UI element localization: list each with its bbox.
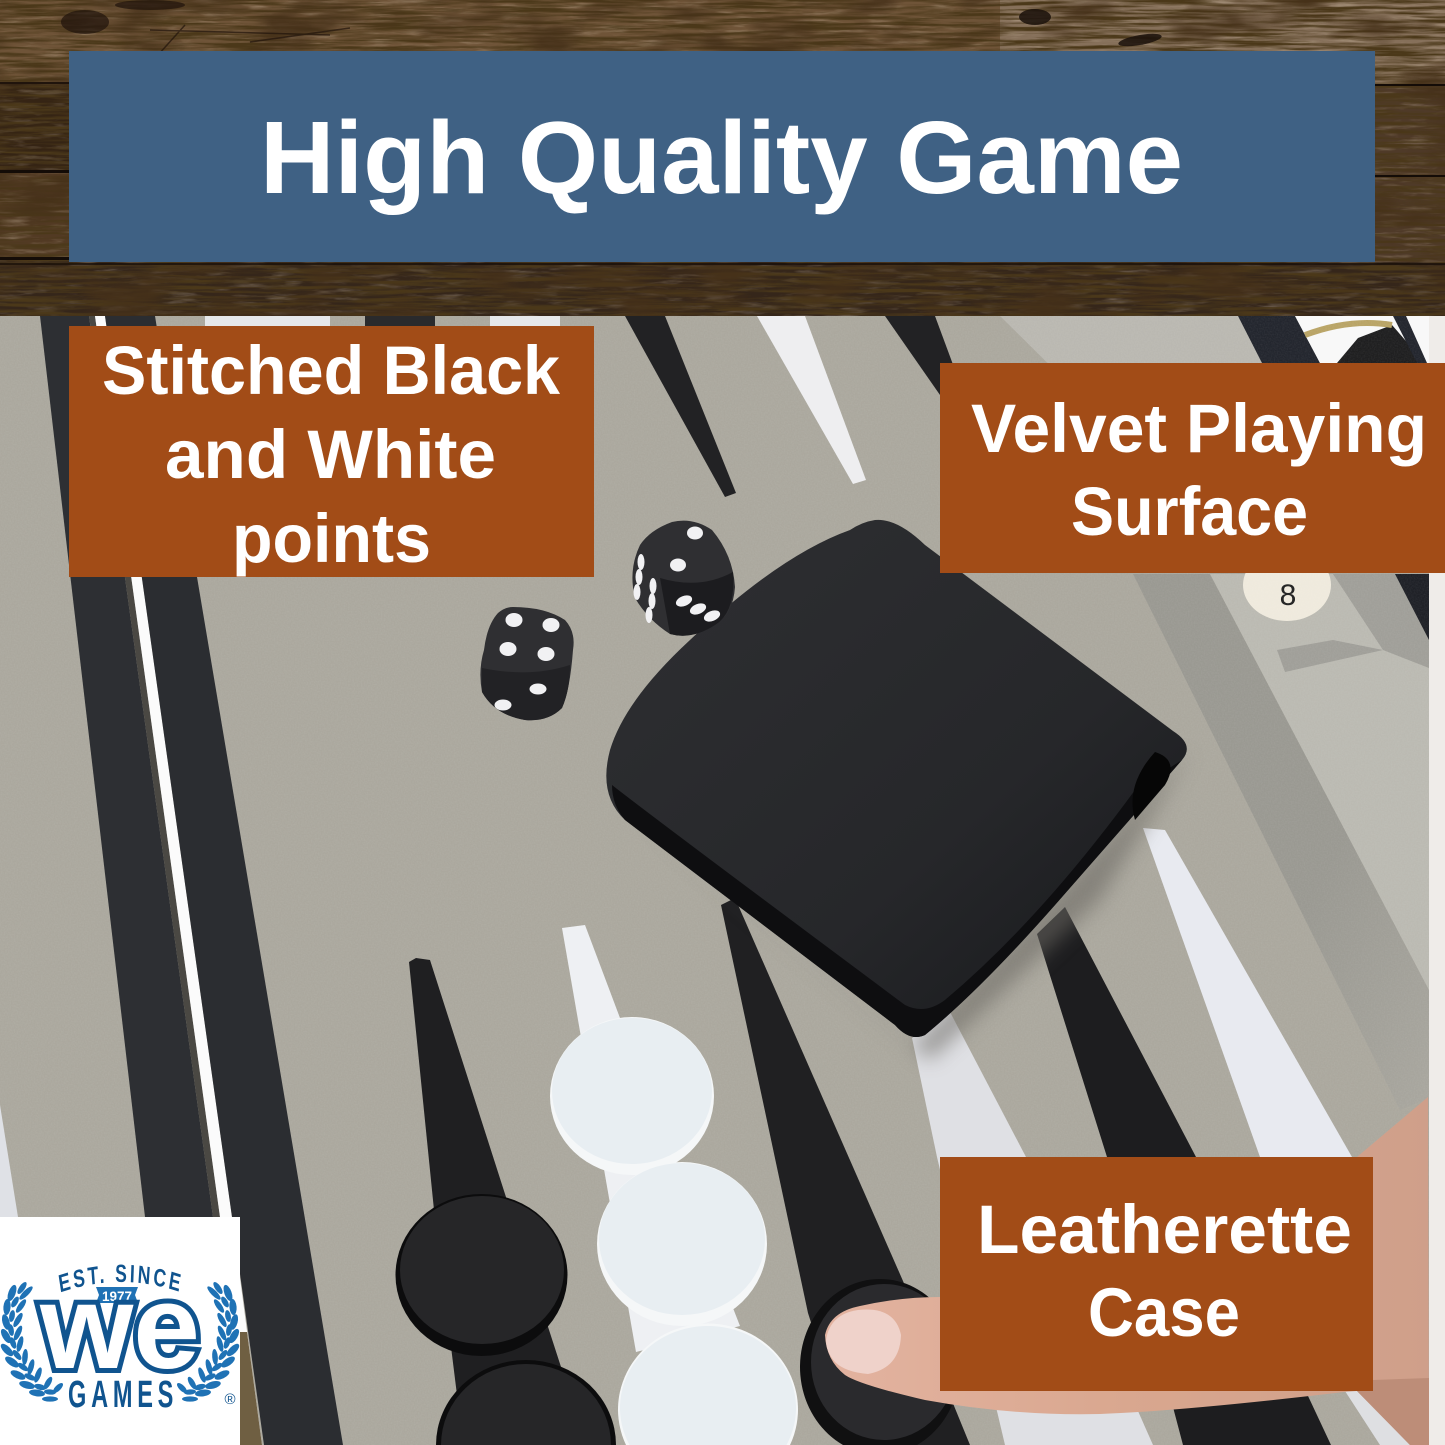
- callout: leatherette case: [940, 1157, 1373, 1391]
- white checker bottom: [618, 1324, 798, 1445]
- white point centre-left: [562, 925, 740, 1352]
- cup dark lower lip: [612, 760, 1182, 1037]
- die right: [632, 521, 735, 636]
- callout: velvet surface: Velvet Playing: [971, 390, 1427, 467]
- hand and thumb: [825, 1097, 1429, 1445]
- photo: backgammon board: [0, 316, 1445, 1445]
- tray compartment: [1210, 574, 1429, 990]
- black point top 1: [625, 316, 736, 497]
- callout: leatherette case: Leatherette: [977, 1191, 1352, 1268]
- right storage tray: [1000, 316, 1429, 1110]
- top corner white backdrop: [1295, 316, 1429, 363]
- logo wordmark: we: [39, 1260, 200, 1394]
- callout: stitched points: and White: [165, 416, 496, 493]
- board dark rail one: [40, 316, 213, 1217]
- hinge: [240, 1332, 262, 1445]
- black checker left lower: [436, 1360, 616, 1445]
- callout: stitched points: Stitched Black: [102, 332, 561, 409]
- shadow under dice cup: [610, 750, 1190, 1060]
- callout: stitched points: [69, 326, 594, 577]
- black checker under thumb: [800, 1279, 960, 1445]
- white point below cup: [912, 1012, 1153, 1445]
- title banner: [69, 51, 1375, 262]
- callout: velvet surface: Surface: [1071, 473, 1308, 550]
- white point far right: [1345, 1391, 1410, 1445]
- logo year banner: [96, 1287, 138, 1304]
- tray pocket shadow: [1277, 640, 1383, 672]
- black point left: [409, 958, 562, 1395]
- callout: velvet surface: [940, 363, 1445, 573]
- black point bottom centre right: [1037, 907, 1331, 1445]
- white checker middle: [597, 1162, 767, 1326]
- tray wall shadow band: [1133, 574, 1429, 1110]
- title banner: High Quality Game: [260, 100, 1183, 215]
- registered mark: ®: [224, 1391, 236, 1408]
- logo year banner: 1977: [102, 1289, 132, 1304]
- felt playing surface: [0, 316, 1445, 1445]
- brass ring: [1305, 323, 1392, 335]
- callout: leatherette case: Case: [1088, 1274, 1240, 1351]
- rail seam shadow: [89, 316, 220, 1217]
- right laurel: [175, 1281, 241, 1402]
- white point bottom right: [1143, 828, 1352, 1157]
- top rail fragments: [205, 316, 560, 326]
- storage tray checker: 8: [1280, 579, 1296, 612]
- cup opening: [1132, 752, 1171, 820]
- callout: stitched points: points: [232, 500, 431, 577]
- white point at left edge: [0, 1105, 18, 1217]
- right page margin: [1429, 316, 1445, 1445]
- white checker top: [550, 1017, 714, 1175]
- board white inlay: [95, 316, 262, 1445]
- top corner dark rail: [1238, 316, 1320, 363]
- brand logo: [0, 1217, 262, 1445]
- wood plank background: [0, 0, 1445, 316]
- black point centre: [721, 898, 970, 1445]
- thumbnail: [826, 1310, 901, 1374]
- storage tray checker: [1243, 549, 1331, 621]
- black point top 3: [885, 316, 955, 395]
- top corner clasp: [1337, 325, 1425, 363]
- die left: [480, 607, 574, 720]
- black checker left upper: [396, 1194, 568, 1356]
- left laurel: [0, 1281, 65, 1402]
- leatherette dice cup: [606, 520, 1187, 1037]
- lower palm shadow: [1357, 1378, 1429, 1445]
- logo text: est since: EST. SINCE: [58, 1264, 181, 1292]
- white point top 2: [757, 316, 866, 484]
- logo text: games: GAMES: [68, 1372, 173, 1415]
- board dark rail two: [105, 316, 343, 1445]
- felt texture: [0, 316, 1429, 1445]
